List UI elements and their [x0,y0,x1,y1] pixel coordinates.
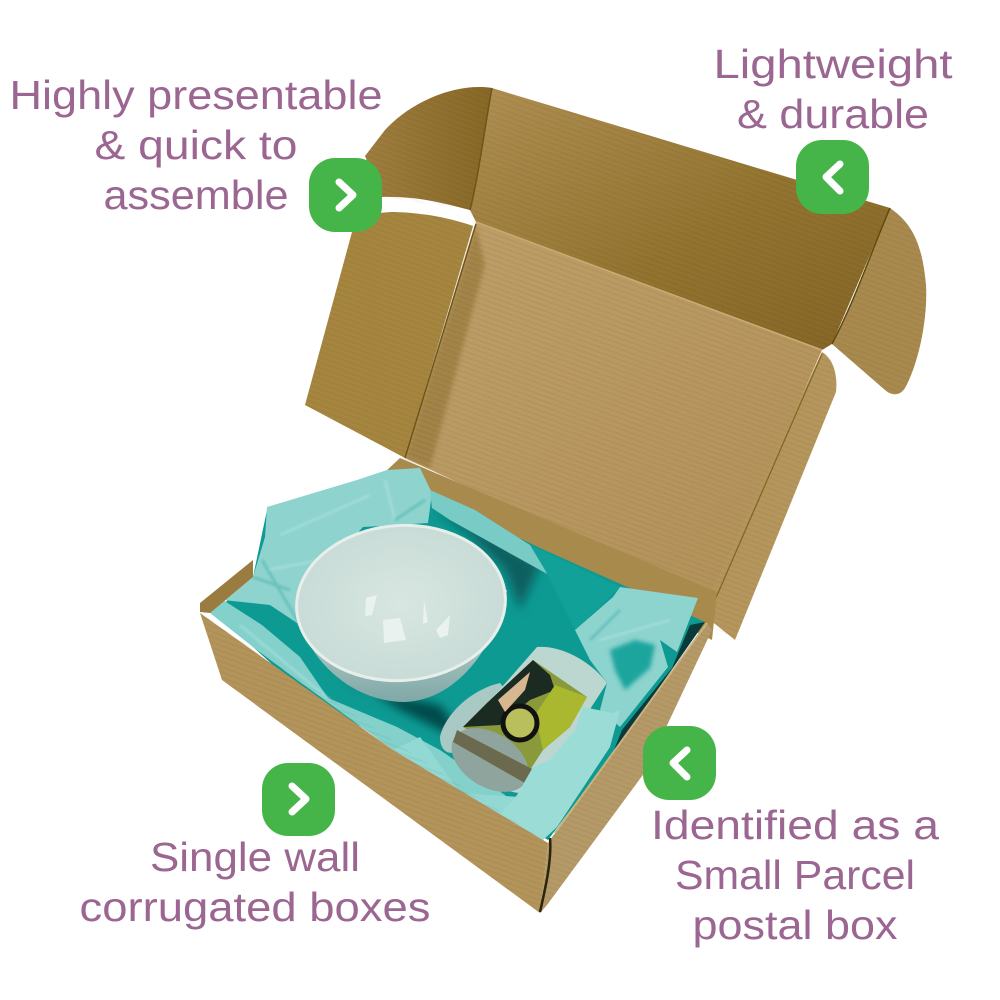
bowl inside [293,520,509,686]
left rim [200,560,253,613]
callout: highly presentable [10,72,383,232]
text: small parcel: Small Parcel [675,852,915,898]
tissue front over mug [500,707,620,840]
lid lower right flap [700,352,836,640]
mug bike wheel [503,706,537,740]
lid upper left flap [365,87,492,210]
text: assemble: assemble [104,172,288,218]
callout: single wall corrugated [80,763,430,930]
text: postal box: postal box [692,902,898,948]
icon: left chevron badge [796,140,869,214]
tissue back strip [430,490,575,590]
text: single wall: Single wall [150,834,360,880]
box outer walls [200,560,712,913]
front right wall [540,623,712,913]
lid top panel [470,88,890,350]
front left wall [200,613,548,913]
tissue wrinkles [240,480,670,700]
text: highly presentable: Highly presentable [10,72,383,118]
lid upper right flap [832,208,926,394]
bowl outer wall [296,590,507,702]
corrugation texture [305,87,926,640]
tissue left front sheet [210,600,545,838]
bowl [290,517,512,702]
wall texture [200,613,712,913]
mug body [453,647,607,793]
bowl highlights [365,595,450,643]
creases [405,88,492,458]
mug artwork [463,660,587,770]
callout: lightweight and durable [714,41,953,214]
mug [440,647,607,805]
tissue under mug [393,737,545,838]
text: durable: & durable [737,91,929,137]
bowl rim [290,517,512,689]
tissue paper and interior [210,468,705,840]
lid fold shadow [405,226,485,468]
callout: small parcel [643,726,939,948]
box corner seam [540,838,550,912]
lid main inner panel [405,222,822,600]
deep shadows [432,510,540,610]
tissue upper left sheet [210,468,432,625]
text: quick to: & quick to [94,122,298,168]
icon: left chevron badge [643,726,716,800]
mug rider [498,672,530,712]
icon: right chevron badge [262,763,335,836]
tissue right bundle [575,587,698,727]
box back wall rim [385,458,717,640]
icon: right chevron badge [309,158,382,232]
lid lower left flap [305,212,473,458]
mug handle [440,683,510,753]
interior dark teal [215,480,705,840]
mug base [440,715,540,805]
text: lightweight: Lightweight [714,41,953,87]
text: corrugated boxes: corrugated boxes [80,884,430,930]
cardboard box lid, open [305,87,926,640]
text: identified as a: Identified as a [651,802,939,848]
box top edge highlight [555,623,707,833]
